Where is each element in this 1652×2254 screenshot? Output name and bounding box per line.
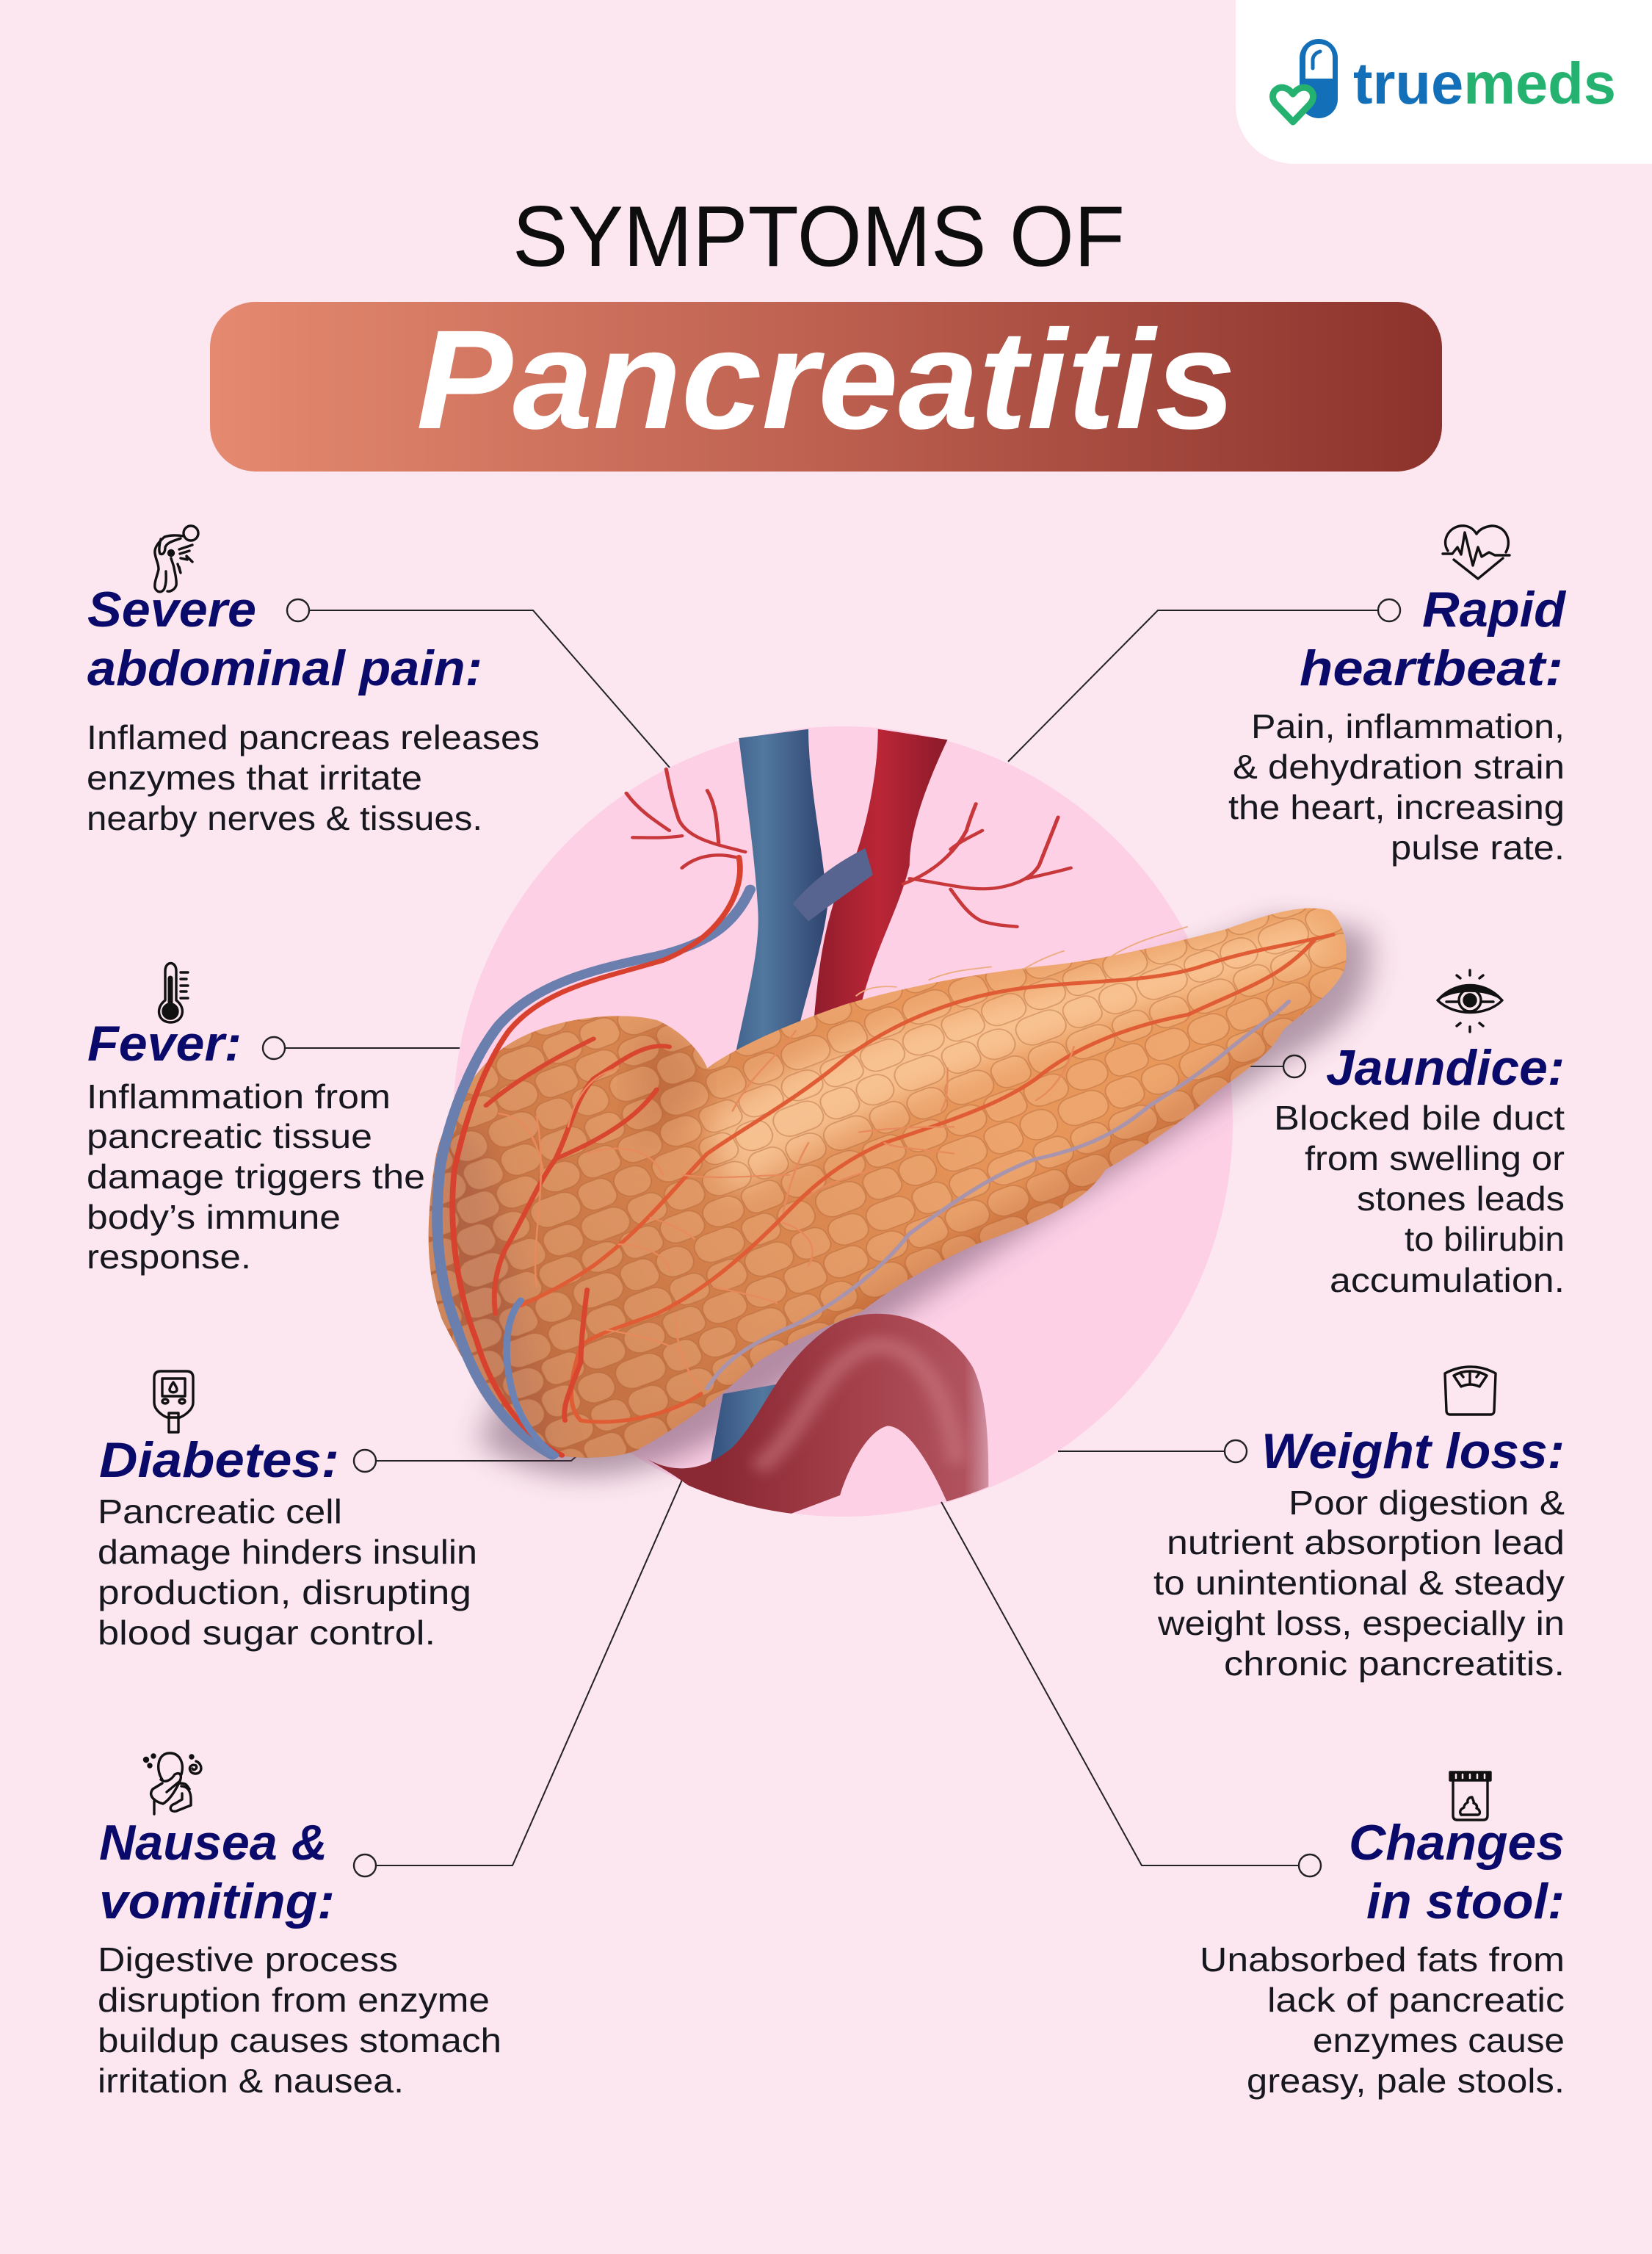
arterial branches top: [626, 769, 1070, 927]
icon: person in abdominal pain: [155, 526, 198, 592]
blue-grey duct: [707, 1001, 1289, 1389]
heading: Nausea &: [99, 1815, 327, 1871]
heading: abdominal pain:: [87, 640, 482, 696]
body text: blood sugar control.: [98, 1614, 435, 1652]
heading: Changes: [1349, 1815, 1565, 1871]
symptom: nausea and vomiting: [98, 1753, 501, 2100]
connector node: [354, 1854, 376, 1876]
body text: pancreatic tissue: [87, 1117, 372, 1155]
body text: damage triggers the: [87, 1157, 425, 1196]
icon: stool sample jar: [1450, 1772, 1490, 1820]
intestine loop: [641, 1314, 988, 1517]
body text: nutrient absorption lead: [1167, 1523, 1565, 1561]
red artery: [811, 729, 947, 1052]
body text: enzymes cause: [1313, 2021, 1565, 2059]
logo wordmark: truemeds: [1353, 51, 1616, 116]
vessel crossing: [793, 848, 873, 921]
heading: Rapid: [1422, 582, 1566, 637]
body text: to bilirubin: [1405, 1220, 1565, 1258]
body text: irritation & nausea.: [98, 2062, 404, 2100]
symptom: fever: [87, 964, 425, 1276]
body text: from swelling or: [1305, 1139, 1565, 1177]
body text: weight loss, especially in: [1157, 1604, 1565, 1642]
left branch: vein and artery along head: [438, 857, 750, 1455]
body text: Unabsorbed fats from: [1200, 1940, 1565, 1979]
main orange arteries: [521, 935, 1333, 1422]
icon: weighing scale: [1445, 1367, 1496, 1415]
connector node: [263, 1037, 285, 1059]
vessels on pancreas: [486, 935, 1333, 1422]
shadow under pancreas: [479, 919, 1369, 1476]
body text: Blocked bile duct: [1274, 1099, 1565, 1137]
connector node: [1283, 1055, 1305, 1077]
symptom: weight loss: [1153, 1367, 1565, 1683]
connector node: [1299, 1854, 1321, 1876]
body text: Inflamed pancreas releases: [87, 718, 540, 756]
heading: Severe: [87, 582, 256, 637]
symptom: jaundice: [1274, 970, 1565, 1299]
heading: Fever:: [87, 1016, 242, 1072]
icon: heart with pulse: [1443, 526, 1510, 579]
pancreas shading and lobules: [404, 865, 1395, 1506]
symptom: changes in stool: [1200, 1772, 1565, 2100]
body text: response.: [87, 1238, 251, 1276]
body text: stones leads: [1357, 1180, 1565, 1218]
body text: Pancreatic cell: [98, 1492, 342, 1531]
body text: production, disrupting: [98, 1573, 471, 1611]
body text: greasy, pale stools.: [1247, 2062, 1565, 2100]
heading: in stool:: [1366, 1874, 1565, 1929]
body text: body’s immune: [87, 1198, 341, 1236]
heading: Weight loss:: [1261, 1423, 1565, 1479]
icon: thermometer: [159, 964, 188, 1022]
heading: heartbeat:: [1300, 640, 1563, 696]
central pink circle: [453, 726, 1233, 1517]
body text: Inflammation from: [87, 1077, 391, 1116]
title banner: Pancreatitis: Pancreatitis: [416, 300, 1236, 458]
symptom: diabetes: [98, 1371, 477, 1652]
body text: Poor digestion &: [1289, 1484, 1565, 1522]
icon: eye: [1438, 970, 1502, 1032]
body text: Pain, inflammation,: [1251, 707, 1565, 745]
heading: Diabetes:: [99, 1432, 339, 1488]
icon: capsule and heart: [1273, 39, 1338, 122]
title banner: Pancreatitis: [210, 300, 1442, 472]
illustration: pancreas with blood vessels: [404, 729, 1395, 1517]
body text: disruption from enzyme: [98, 1981, 490, 2019]
fine tail fibres: [856, 927, 1188, 996]
logo: truemeds: [1236, 0, 1652, 164]
body text: damage hinders insulin: [98, 1533, 477, 1571]
body text: pulse rate.: [1391, 828, 1565, 867]
body text: & dehydration strain: [1233, 748, 1565, 786]
body text: chronic pancreatitis.: [1224, 1644, 1565, 1683]
connector lines: [285, 610, 1377, 1865]
body text: accumulation.: [1330, 1261, 1565, 1299]
body text: lack of pancreatic: [1267, 1981, 1565, 2019]
heading: vomiting:: [99, 1874, 335, 1929]
body text: Digestive process: [98, 1940, 398, 1979]
body text: the heart, increasing: [1228, 788, 1565, 826]
connector node: [354, 1450, 376, 1472]
body text: to unintentional & steady: [1153, 1564, 1565, 1602]
symptom: severe abdominal pain: [87, 526, 540, 837]
pancreas body: [429, 909, 1347, 1458]
icon: glucose meter: [154, 1371, 193, 1432]
icon: nauseous person: [144, 1753, 201, 1814]
connector node: [287, 599, 309, 621]
connector node: [1225, 1440, 1247, 1462]
title: symptoms of: SYMPTOMS OF: [512, 188, 1125, 284]
heading: Jaundice:: [1326, 1040, 1565, 1096]
logo card: [1236, 0, 1652, 164]
symptom: rapid heartbeat: [1228, 526, 1566, 867]
body text: nearby nerves & tissues.: [87, 799, 482, 837]
blue vein: [711, 729, 827, 1463]
body text: enzymes that irritate: [87, 759, 422, 797]
body text: buildup causes stomach: [98, 2021, 501, 2059]
connector node: [1378, 599, 1400, 621]
